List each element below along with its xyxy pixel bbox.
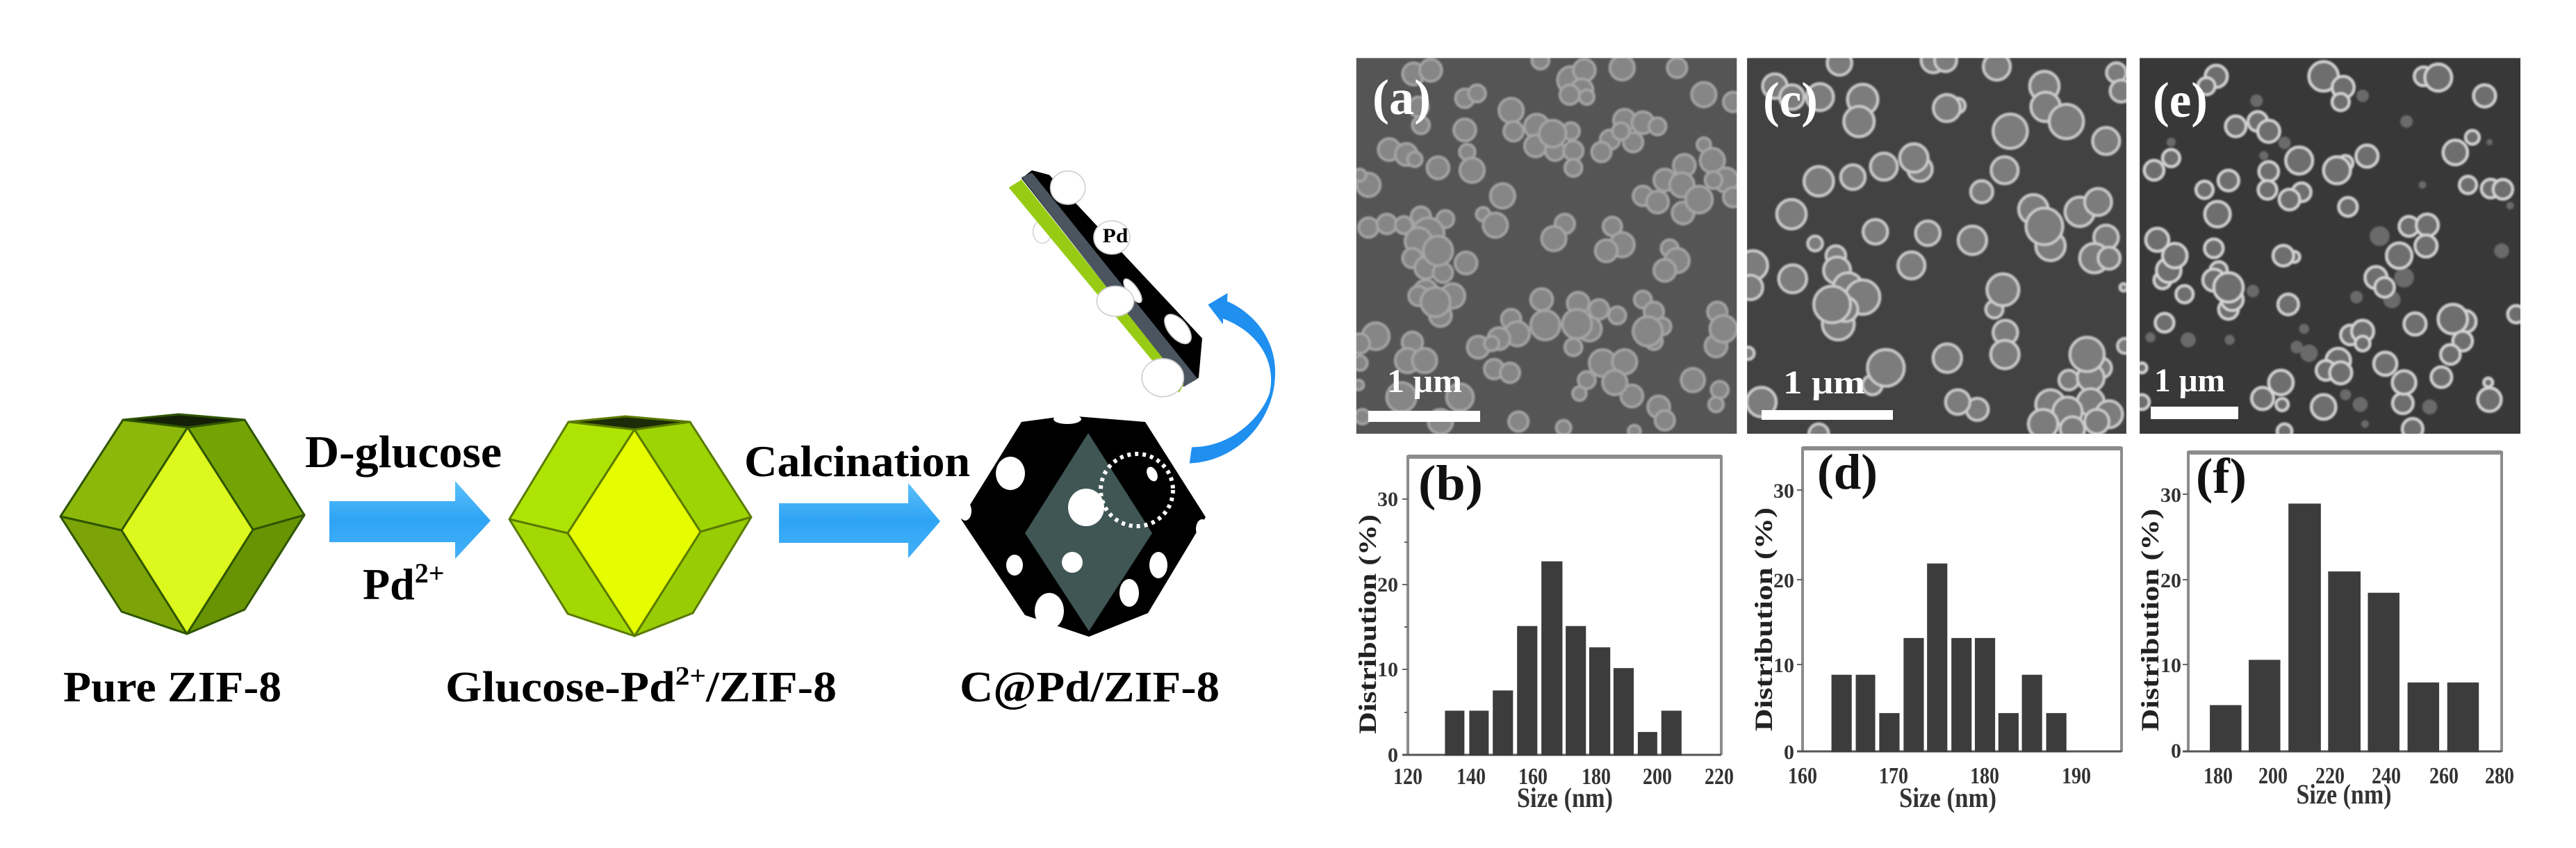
- y tick labels: 10: [1773, 654, 1794, 677]
- x axis title: Size (nm): [1517, 782, 1613, 813]
- y tick labels: 20: [2160, 569, 2181, 592]
- x tick labels: 280: [2485, 763, 2514, 789]
- y tick labels: 10: [1377, 658, 1398, 681]
- label: Pure ZIF-8: Pure ZIF-8: [63, 664, 281, 711]
- y tick labels: 0: [1784, 741, 1794, 764]
- y tick labels: 0: [1388, 744, 1398, 767]
- arrow: D-glucose step: [329, 481, 491, 559]
- label: Glucose-Pd2+/ZIF-8: Glucose-Pd: [445, 664, 656, 711]
- label: Glucose-Pd2+/ZIF-8: 2+: [675, 662, 706, 691]
- icon: pure ZIF-8 crystal: [60, 414, 304, 634]
- chart: histogram d: [1750, 444, 2122, 813]
- label: scale 1 um: 1 μm: [1783, 364, 1865, 401]
- y tick labels: 30: [2160, 484, 2181, 507]
- plot frame: [2183, 452, 2502, 752]
- x tick labels: 200: [2258, 763, 2288, 789]
- icon: glucose-Pd crystal: [509, 416, 751, 636]
- y axis title: Distribution (%): [1354, 514, 1381, 734]
- chart: histogram f: [2136, 448, 2514, 810]
- y tick labels: [2160, 484, 2181, 763]
- label: Pd2+: Pd: [363, 560, 415, 609]
- label: (d): (d): [1817, 444, 1878, 500]
- label: (c): (c): [1763, 72, 1818, 128]
- x tick labels: 180: [1582, 764, 1611, 790]
- x tick labels: 160: [1788, 763, 1817, 789]
- label: Calcination: Calcination: [744, 437, 970, 486]
- x axis title: Size (nm): [2296, 778, 2392, 810]
- label: D-glucose: D-glucose: [305, 427, 502, 478]
- y tick labels: 0: [2171, 740, 2181, 763]
- x tick labels: 220: [1705, 764, 1734, 790]
- arrow: curved blue: [1190, 293, 1275, 464]
- x tick labels: 180: [1970, 763, 1999, 789]
- x tick labels: 200: [1643, 764, 1672, 790]
- y tick labels: 30: [1377, 488, 1398, 511]
- x tick labels: [1788, 763, 2091, 789]
- label: (f): (f): [2196, 448, 2247, 504]
- x tick labels: 220: [2315, 763, 2345, 789]
- panel: SEM image a: [1350, 52, 1746, 446]
- y tick labels: 20: [1377, 573, 1398, 596]
- plot frame: [1797, 448, 2122, 752]
- x tick labels: 260: [2429, 763, 2459, 789]
- scale bar: [2151, 407, 2238, 419]
- label: (b): (b): [1418, 455, 1483, 511]
- y axis title: Distribution (%): [1750, 507, 1778, 731]
- y tick labels: 20: [1773, 569, 1794, 592]
- bars: [1832, 564, 2067, 752]
- x tick labels: 140: [1457, 764, 1486, 790]
- x tick labels: 180: [2204, 763, 2233, 789]
- x axis title: Size (nm): [1899, 782, 1996, 813]
- icon: C@Pd/ZIF-8 crystal: [959, 414, 1208, 637]
- label: scale 1 um: 1 μm: [2154, 362, 2225, 399]
- panel: synthesis scheme: [60, 170, 1275, 711]
- y tick labels: 30: [1773, 480, 1794, 503]
- x tick labels: 170: [1879, 763, 1908, 789]
- x tick labels: 190: [2062, 763, 2091, 789]
- y tick labels: [1773, 480, 1794, 764]
- plot frame: [1402, 457, 1721, 755]
- x tick labels: [2204, 763, 2514, 789]
- y tick labels: [1377, 488, 1398, 767]
- label: Pd2+: 2+: [415, 557, 444, 589]
- scale bar: [1368, 411, 1480, 422]
- x tick labels: 240: [2372, 763, 2401, 789]
- panel: SEM image e: [2135, 56, 2529, 446]
- chart: histogram b: [1354, 455, 1734, 813]
- label: C@Pd/ZIF-8: C@Pd/ZIF-8: [960, 664, 1220, 711]
- label: scale 1 um: 1 μm: [1387, 363, 1462, 400]
- scale bar: [1762, 410, 1893, 420]
- arrow: calcination step: [779, 483, 940, 558]
- label: (e): (e): [2153, 72, 2208, 128]
- x tick labels: [1393, 764, 1734, 790]
- y tick labels: 10: [2160, 654, 2181, 677]
- bars: [2210, 503, 2479, 752]
- label: (a): (a): [1372, 70, 1431, 125]
- label: Glucose-Pd2+/ZIF-8: /ZIF-8: [705, 664, 837, 711]
- x tick labels: 120: [1393, 764, 1422, 790]
- label: Pd: Pd: [1103, 225, 1129, 247]
- y axis title: Distribution (%): [2136, 509, 2164, 731]
- callout: dotted circle: [1101, 454, 1173, 526]
- icon: exfoliated plate with Pd: [1009, 170, 1202, 397]
- panel: SEM image c: [1738, 48, 2136, 446]
- bars: [1445, 562, 1682, 756]
- x tick labels: 160: [1518, 764, 1548, 790]
